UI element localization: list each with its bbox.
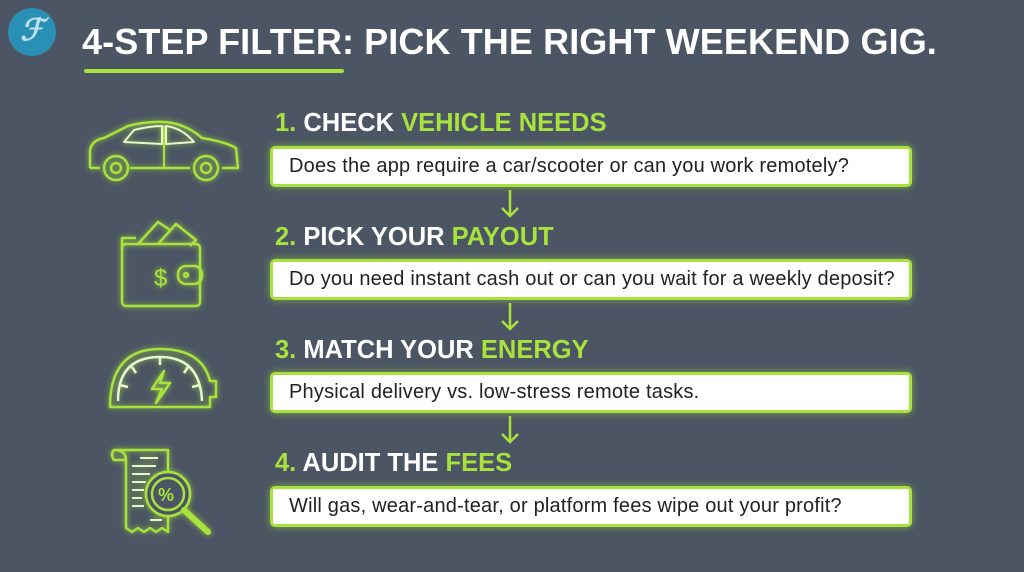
step 1 box: Does the app require a car/scooter or can you work remotely? [289,155,849,177]
arrow 2 [501,303,519,331]
step 1 heading: 1. CHECK VEHICLE NEEDS [275,109,607,137]
step 3 box [270,372,912,413]
step 3 box: Physical delivery vs. low-stress remote tasks. [289,381,699,403]
step 4 box: Will gas, wear-and-tear, or platform fees wipe out your profit? [289,495,842,517]
step 1 box [270,146,912,187]
step 2 box [270,259,912,300]
icon: receipt with magnifier: % [158,485,174,505]
logo [8,8,56,56]
icon: wallet [117,218,207,311]
title: 4-STEP FILTER: PICK THE RIGHT WEEKEND GIG. [82,21,937,62]
icon: receipt with magnifier [108,445,214,538]
step 4 box [270,486,912,527]
icon: car [85,117,242,185]
arrow 1 [501,190,519,218]
arrow 3 [501,416,519,444]
icon: wallet: $ [154,265,167,292]
step 3 heading: 3. MATCH YOUR ENERGY [275,336,589,364]
step 2 heading: 2. PICK YOUR PAYOUT [275,223,554,251]
title underline [84,69,344,73]
icon: gauge [105,344,221,412]
step 4 heading: 4. AUDIT THE FEES [275,449,512,477]
step 2 box: Do you need instant cash out or can you wait for a weekly deposit? [289,268,895,290]
logo: ℱ [20,14,44,47]
